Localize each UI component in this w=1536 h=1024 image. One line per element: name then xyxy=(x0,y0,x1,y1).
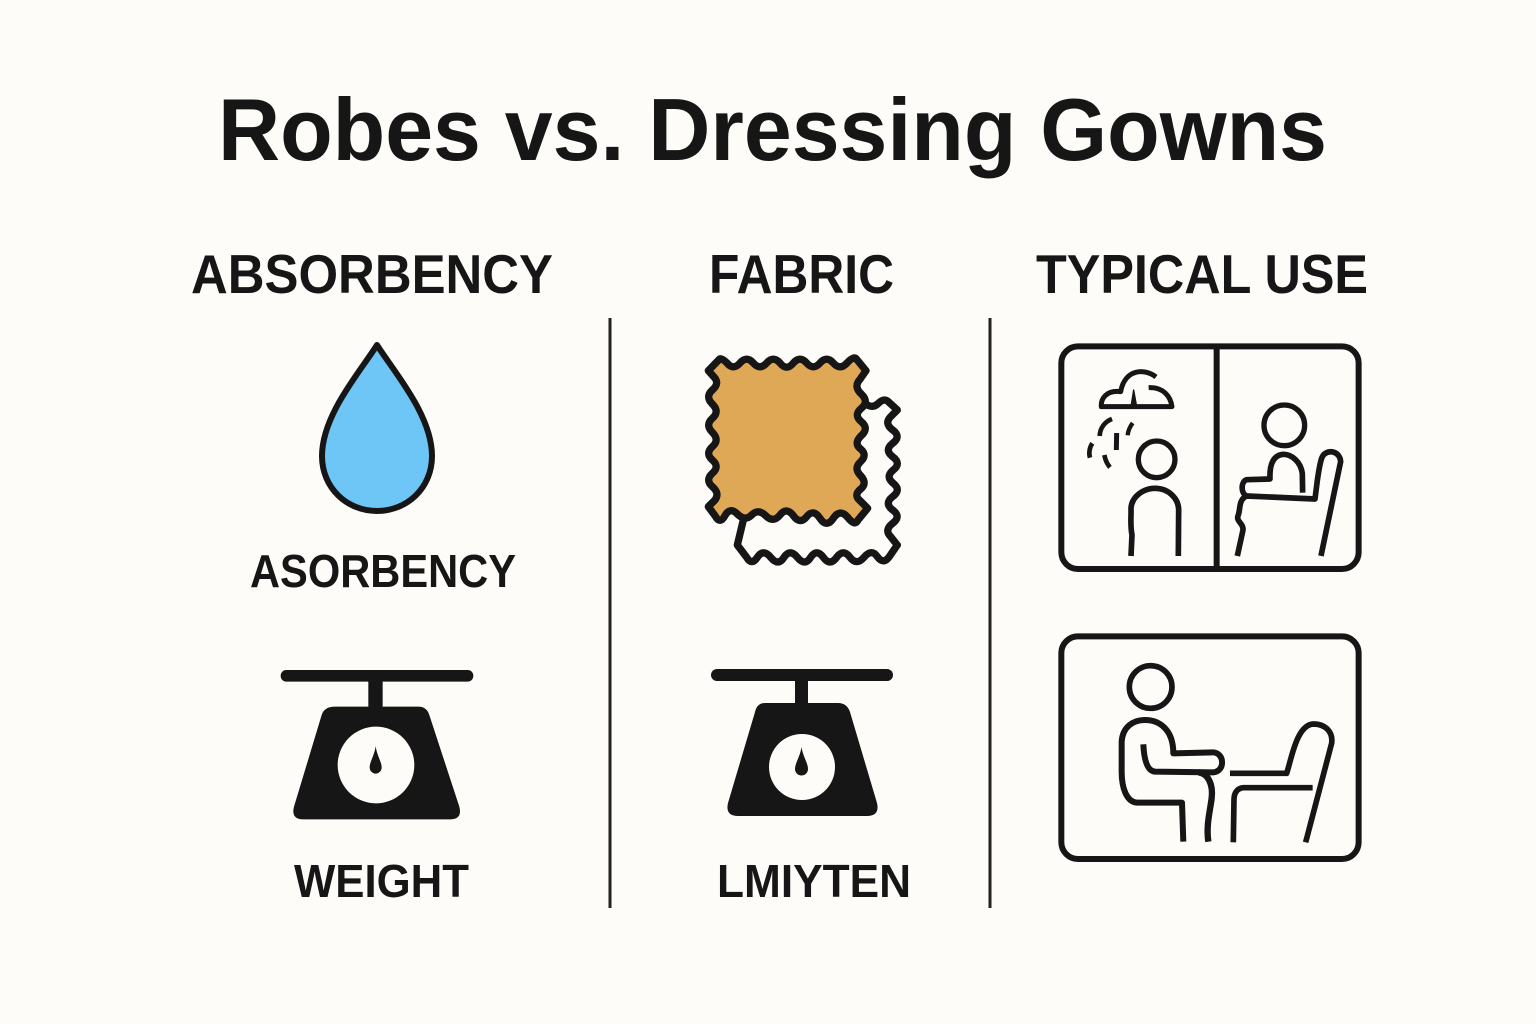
table xyxy=(1230,724,1332,842)
back swatch outline xyxy=(737,400,897,562)
leg xyxy=(1198,772,1212,842)
icon: fabric swatches xyxy=(708,358,897,562)
cloud xyxy=(1101,372,1172,407)
water drops xyxy=(1100,419,1112,436)
body xyxy=(1122,720,1222,842)
head xyxy=(1129,666,1172,708)
person under shower xyxy=(1138,441,1175,478)
front swatch xyxy=(708,358,868,523)
heading: fabric: FABRIC xyxy=(709,243,894,305)
title: Robes vs. Dressing Gowns xyxy=(218,80,1327,179)
icon panel: seated at table xyxy=(1061,636,1359,859)
heading: typical use: TYPICAL USE xyxy=(1036,243,1368,305)
icon: scale, fabric column xyxy=(711,669,893,816)
label: lmiyten: LMIYTEN xyxy=(717,855,911,907)
seated person in armchair xyxy=(1264,405,1305,446)
label: weight: WEIGHT xyxy=(294,855,469,907)
heading: absorbency: ABSORBENCY xyxy=(191,243,553,305)
icon: scale, absorbency column xyxy=(281,670,473,819)
icon panel: shower and armchair xyxy=(1061,346,1359,569)
icon: water drop xyxy=(322,345,432,511)
chair xyxy=(1233,788,1313,842)
label: asorbency: ASORBENCY xyxy=(250,545,516,597)
